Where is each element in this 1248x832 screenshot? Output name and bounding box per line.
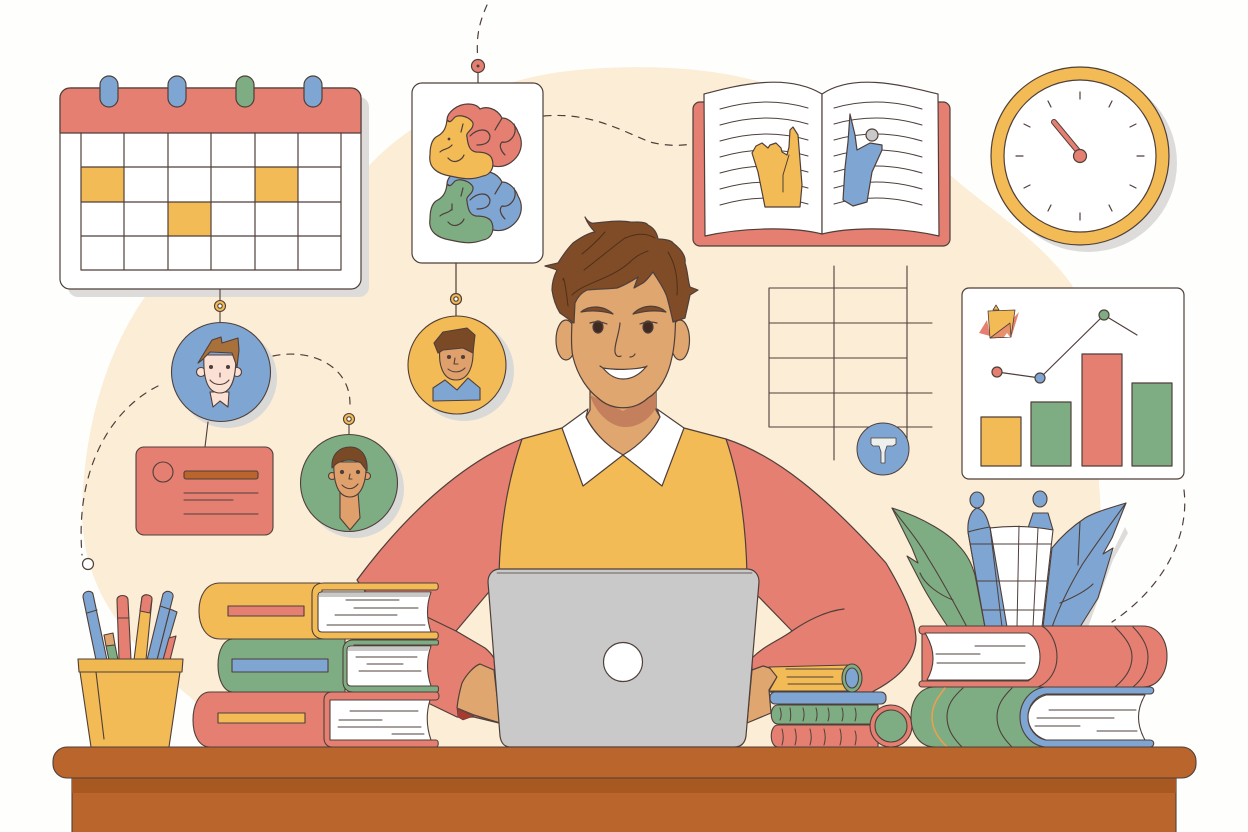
leaf: green — [892, 508, 985, 627]
panel: brain card — [412, 60, 543, 263]
ears — [556, 320, 690, 360]
green book — [771, 705, 878, 724]
hand: left — [457, 664, 500, 723]
avatar: green man — [300, 414, 404, 538]
cuff shadow — [457, 709, 474, 720]
figure: blue hand — [843, 114, 882, 206]
bar chart — [981, 354, 1172, 466]
arm: right sleeve — [726, 439, 916, 692]
eyes — [590, 321, 657, 333]
brain: upper — [430, 104, 521, 179]
icon: filter badge — [857, 423, 909, 475]
green book — [911, 687, 1154, 747]
sweater vest — [499, 428, 747, 575]
face — [572, 265, 676, 408]
panel: calendar — [60, 76, 369, 297]
table sketch — [769, 266, 932, 460]
connector: brain card to avatar — [450, 263, 462, 316]
red book — [193, 692, 439, 747]
avatar: yellow boy — [408, 316, 514, 421]
red book — [771, 725, 878, 747]
plant and pen holder — [892, 491, 1128, 627]
left book stack — [193, 583, 439, 747]
hair strands — [563, 232, 677, 306]
hand: right — [747, 666, 777, 723]
pencil cup — [78, 591, 183, 747]
icon: small tag — [979, 305, 1019, 338]
leaf: blue — [1043, 503, 1126, 627]
figure: yellow hand — [752, 127, 802, 207]
leaf shadow — [1076, 527, 1128, 627]
brows — [581, 306, 666, 314]
nose — [615, 323, 635, 357]
background blob — [82, 67, 1101, 748]
red book — [919, 626, 1167, 687]
hair — [545, 217, 698, 323]
brain: lower — [430, 168, 521, 243]
blue book — [770, 692, 886, 704]
yellow book — [199, 583, 438, 639]
right book stack — [911, 626, 1167, 747]
yellow roll — [769, 664, 862, 692]
arm: left sleeve — [357, 439, 522, 723]
laptop — [457, 569, 777, 747]
id card — [136, 422, 273, 535]
panel: chart card — [962, 288, 1184, 479]
dashed connectors — [81, 5, 1185, 622]
line chart — [992, 310, 1137, 383]
small book stack — [769, 664, 912, 747]
pens — [968, 491, 1053, 532]
ring end — [870, 705, 912, 747]
smile — [600, 366, 647, 379]
avatar: blue boy — [172, 289, 277, 428]
person: student — [357, 217, 916, 723]
panel: wall clock — [991, 67, 1177, 252]
neck — [586, 385, 660, 455]
green book — [218, 639, 438, 692]
grid cup — [968, 526, 1053, 627]
desk — [53, 747, 1196, 832]
loose node — [82, 558, 94, 570]
panel: open book — [693, 82, 950, 246]
collar — [562, 409, 684, 486]
